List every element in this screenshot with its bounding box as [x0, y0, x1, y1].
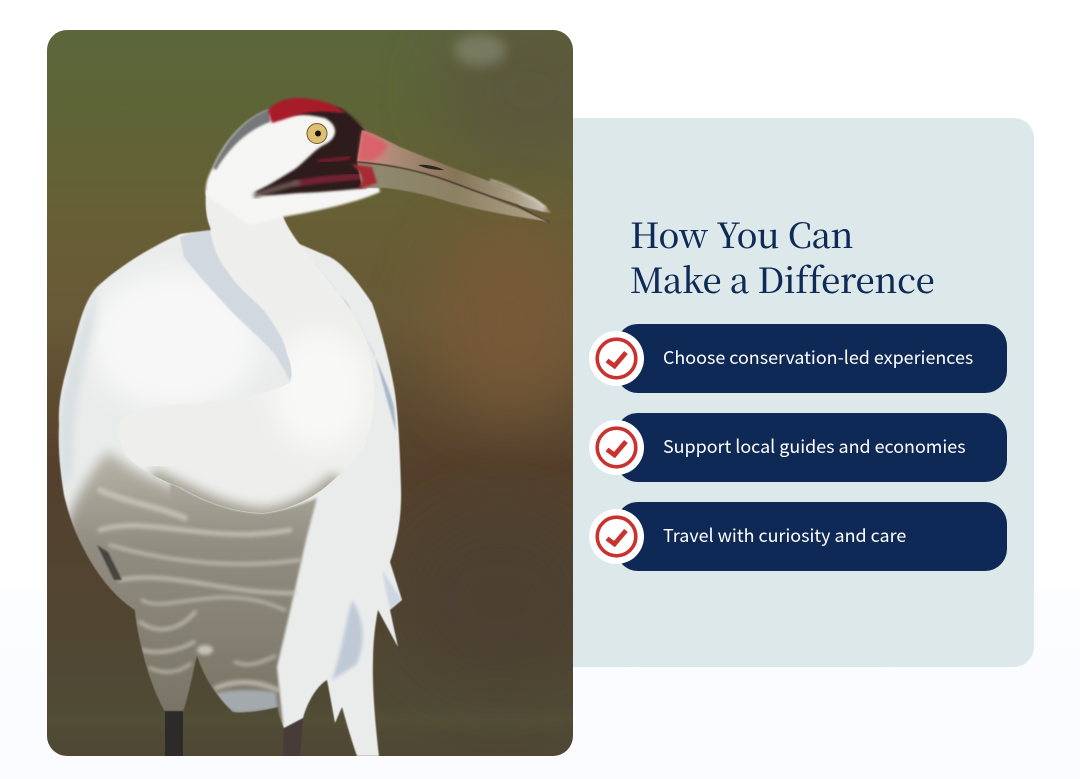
text 3: Travel with curiosity and care: [663, 522, 906, 548]
dappled light: [100, 490, 300, 690]
crane neck and breast: [119, 190, 374, 518]
list item 3: [589, 502, 1007, 571]
text 2: Support local guides and economies: [663, 433, 966, 459]
dark primary feather: [97, 545, 122, 580]
heading: [630, 208, 934, 303]
red crown: [268, 98, 345, 123]
red mask streaks: [292, 176, 362, 185]
beak: [351, 130, 553, 222]
crane legs: [165, 706, 303, 758]
white shoulder: [98, 278, 252, 402]
lower shadowed plumage: soft left: [66, 448, 172, 712]
breast shading and highlight: [146, 344, 356, 513]
check icon 2: [589, 420, 644, 475]
shadow under the neck: [180, 229, 292, 384]
eye: [307, 124, 327, 144]
pill 1: [616, 324, 1007, 393]
left edge bluish rim: [60, 299, 96, 482]
photo: whooping crane: [47, 30, 573, 756]
pill 3: [616, 502, 1007, 571]
background: [47, 10, 620, 756]
back shadow right of neck: [328, 280, 396, 430]
check icon 1: [589, 331, 644, 386]
dark face mask: [255, 100, 378, 195]
heading: How You Can: [630, 208, 853, 258]
heading: Make a Difference: [630, 253, 934, 303]
grey nape: [213, 109, 270, 170]
crane head: [206, 98, 380, 225]
pale wing edge: [216, 688, 280, 713]
head base white: [206, 110, 380, 225]
list item 2: [589, 413, 1007, 482]
crane body: [59, 229, 402, 756]
list item 1: [589, 324, 1007, 393]
panel: text background: [500, 118, 1034, 667]
lower shadowed plumage: right edge: [170, 482, 317, 730]
text 1: Choose conservation-led experiences: [663, 344, 973, 370]
blue tail shadow: [332, 600, 363, 680]
pill 2: [616, 413, 1007, 482]
check icon 3: [589, 509, 644, 564]
